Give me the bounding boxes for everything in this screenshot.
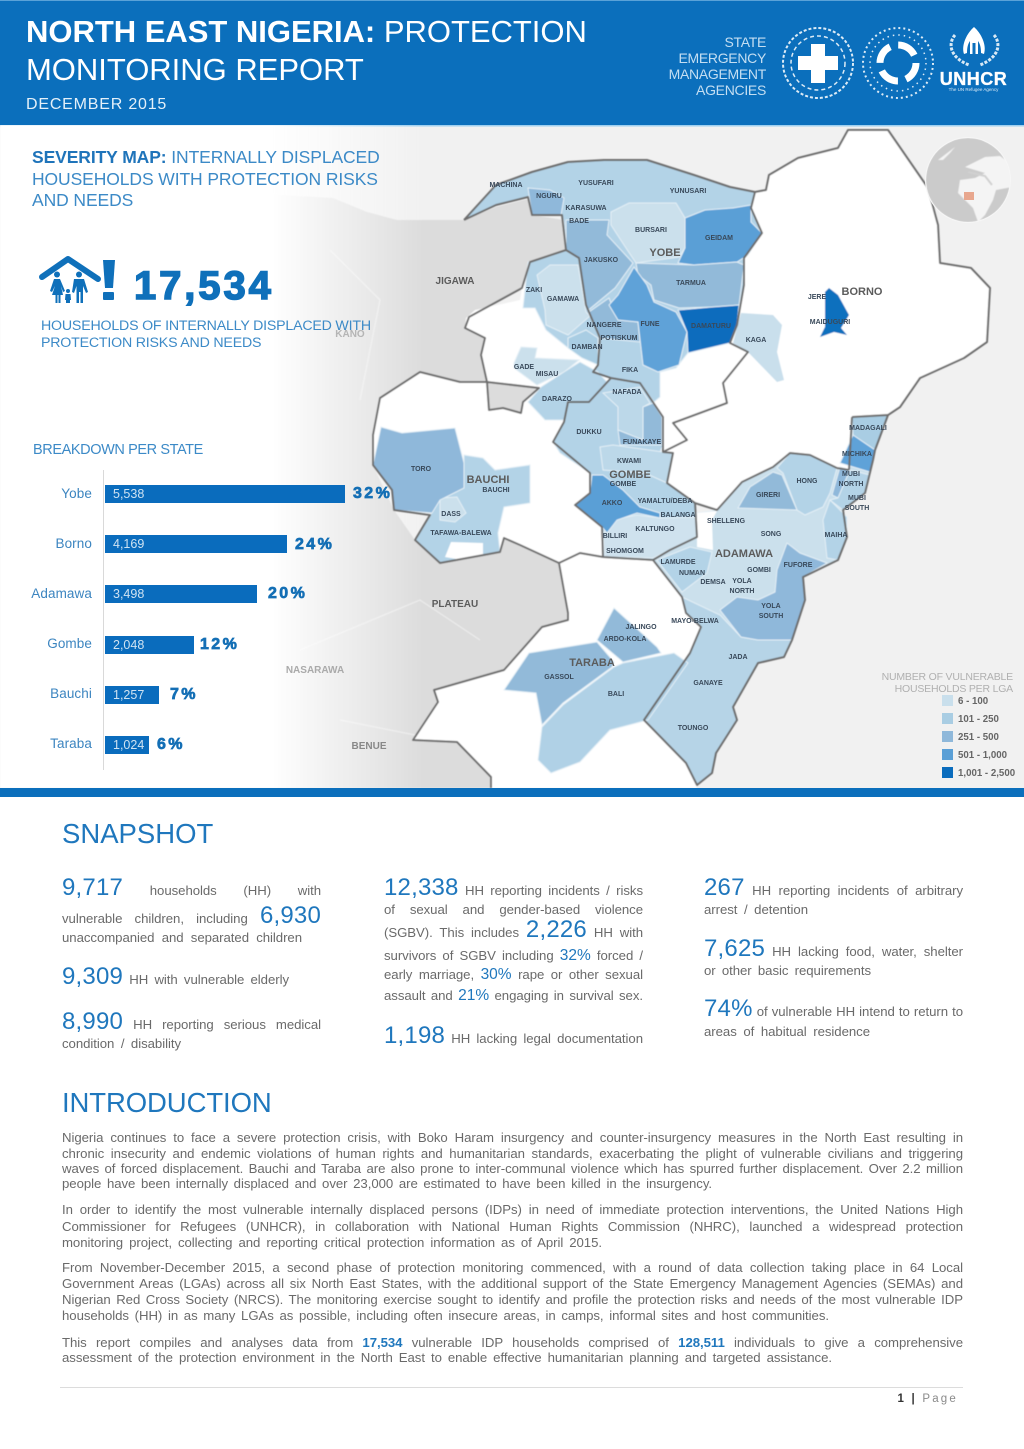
neighbouring and state labels: KANO — [335, 329, 365, 340]
LGA labels: GOMBI — [747, 567, 771, 574]
total households figure: 17,534 — [134, 264, 274, 308]
snapshot column 3 — [704, 874, 963, 1039]
bar chart: breakdown per state: Adamawa — [31, 586, 92, 601]
LGA labels: GOMBE — [610, 481, 637, 488]
LGA labels: TORO — [411, 466, 432, 473]
LGA labels: DEMSA — [700, 579, 726, 586]
LGA labels: MAIHA — [825, 532, 847, 539]
snapshot column 2: survivors of SGBV including 32% forced / — [384, 947, 643, 964]
partner label — [669, 34, 766, 98]
Jakusko — [566, 220, 633, 312]
bar chart: breakdown per state: Gombe — [47, 636, 92, 651]
Geidam — [678, 205, 762, 265]
LGA labels: KALTUNGO — [635, 526, 675, 533]
logo: UNHCR — [940, 27, 1007, 92]
blue divider bar — [0, 788, 1024, 797]
logo: UNHCR: UNHCR — [940, 69, 1007, 89]
introduction text: Nigeria continues to face a severe protection crisis, with Boko Haram insurgency and counter-insurgency measures in the North East resulting in — [62, 1130, 963, 1145]
LGA labels: NORTH — [730, 588, 754, 595]
severity map — [0, 125, 1024, 788]
LGA labels: KARASUWA — [565, 205, 607, 212]
snapshot column 1: condition / disability — [62, 1036, 181, 1051]
snapshot column 1: 8,990 HH reporting serious medical — [62, 1008, 321, 1035]
Nguru — [528, 188, 564, 215]
LGA labels: YUSUFARI — [578, 180, 614, 187]
introduction text: Commissioner for Refugees (UNHCR), in collaboration with National Human Rights Commission (NHRC), launched a widespread protection — [62, 1219, 963, 1234]
neighbouring and state labels: PLATEAU — [432, 599, 478, 610]
map title: AND NEEDS — [32, 190, 133, 210]
LGA labels: MUBI — [842, 471, 860, 478]
LGA labels: JERE — [808, 294, 826, 301]
map title — [32, 147, 380, 210]
footer rule and page number: 1 | Page — [898, 1393, 958, 1405]
introduction text — [62, 1130, 963, 1365]
LGA choropleth: Yobe — [464, 160, 762, 402]
LGA labels: BALI — [608, 691, 624, 698]
LGA labels: ARDO-KOLA — [604, 636, 646, 643]
snapshot column 1: 9,309 HH with vulnerable elderly — [62, 963, 289, 990]
LGA labels: YAMALTU/DEBA — [638, 498, 692, 505]
bar chart: breakdown per state: 4,169 — [113, 537, 144, 551]
LGA labels: DAMATURU — [691, 323, 731, 330]
LGA labels: KWAMI — [617, 458, 641, 465]
snapshot column 1: unaccompanied and separated children — [62, 930, 302, 945]
LGA labels: BAUCHI — [482, 487, 510, 494]
bar chart: breakdown per state: 32% — [353, 485, 392, 502]
bar chart: breakdown per state: 2,048 — [113, 638, 144, 652]
LGA choropleth: Adamawa — [644, 415, 888, 785]
LGA labels: FUFORE — [784, 562, 813, 569]
bar chart: breakdown per state: 7% — [170, 686, 198, 703]
LGA labels: SHOMGOM — [606, 548, 644, 555]
snapshot column 3: 7,625 HH lacking food, water, shelter — [704, 934, 963, 962]
LGA labels: YOLA — [761, 603, 781, 610]
LGA labels: NUMAN — [679, 570, 705, 577]
LGA labels: HONG — [796, 478, 818, 485]
partner label: STATE — [724, 34, 766, 50]
partner label: EMERGENCY — [678, 50, 766, 66]
LGA labels: SOUTH — [759, 613, 783, 620]
report title: MONITORING REPORT — [26, 52, 364, 87]
total households caption: HOUSEHOLDS OF INTERNALLY DISPLACED WITH — [41, 318, 371, 334]
locator globe — [925, 137, 1012, 223]
LGA labels: MAYO-BELWA — [671, 618, 719, 625]
bar chart: breakdown per state: 3,498 — [113, 587, 144, 601]
bar chart: breakdown per state: Yobe — [61, 486, 92, 501]
LGA labels: BADE — [569, 218, 589, 225]
snapshot column 3: or other basic requirements — [704, 963, 871, 978]
LGA choropleth: Gombe — [553, 378, 697, 560]
snapshot column 2: early marriage, 30% rape or other sexual — [384, 966, 643, 983]
LGA choropleth: Taraba — [504, 608, 688, 773]
map legend: 501 - 1,000 — [958, 750, 1007, 761]
LGA labels: GAMAWA — [547, 296, 579, 303]
map legend: NUMBER OF VULNERABLE — [882, 671, 1013, 683]
LGA labels: LAMURDE — [660, 559, 696, 566]
bar chart: breakdown per state — [31, 485, 392, 754]
snapshot column 2: of sexual and gender-based violence — [384, 902, 643, 917]
bar chart axis — [103, 470, 104, 770]
LGA labels: JADA — [728, 654, 748, 661]
LGA labels: GADE — [514, 364, 534, 371]
neighbouring and state labels: TARABA — [569, 657, 615, 669]
state outlines — [373, 130, 990, 788]
bar chart: breakdown per state: Taraba — [50, 736, 92, 751]
Nangere — [589, 298, 640, 342]
map legend: 251 - 500 — [958, 732, 999, 743]
total households caption: PROTECTION RISKS AND NEEDS — [41, 335, 261, 351]
neighbouring states — [200, 190, 579, 788]
LGA labels: MACHINA — [489, 182, 523, 189]
LGA labels: NGURU — [536, 193, 562, 200]
partner label: AGENCIES — [696, 82, 766, 98]
neighbouring and state labels: NASARAWA — [286, 665, 344, 676]
introduction text: In order to identify the most vulnerable internally displaced persons (IDPs) in need of immediate protection interventions, the United Nations High — [62, 1202, 963, 1217]
header band — [0, 0, 1024, 125]
report title: NORTH EAST NIGERIA: PROTECTION — [26, 14, 587, 49]
LGA labels: NAFADA — [612, 389, 642, 396]
LGA labels: BURSARI — [635, 227, 667, 234]
snapshot column 3: 267 HH reporting incidents of arbitrary — [704, 874, 963, 901]
LGA labels: DARAZO — [542, 396, 573, 403]
snapshot column 1 — [62, 874, 321, 1051]
LGA labels: KAGA — [746, 337, 766, 344]
LGA labels: YUNUSARI — [670, 188, 706, 195]
neighbouring and state labels — [286, 247, 883, 752]
introduction text: people have been internally displaced and over 23,000 are estimated to have been killed in the insurgency. — [62, 1176, 712, 1191]
LGA labels: MUBI — [848, 495, 866, 502]
logos — [782, 27, 1007, 99]
introduction text: Nigerian Red Cross Society (NRCS). The monitoring exercise sought to identify and profile the protection risks and needs of the most vulnerable IDP — [62, 1292, 963, 1307]
LGA labels: TOUNGO — [678, 725, 709, 732]
snapshot column 2: assault and 21% engaging in survival sex. — [384, 987, 643, 1004]
snapshot column 3: 74% of vulnerable HH intend to return to — [704, 995, 963, 1022]
snapshot column 2: 1,198 HH lacking legal documentation — [384, 1022, 643, 1049]
LGA labels: TARMUA — [676, 280, 706, 287]
bar chart: breakdown per state: Bauchi — [50, 686, 92, 701]
bar chart: breakdown per state: 20% — [268, 585, 307, 602]
logo: cross emblem — [783, 28, 853, 98]
partner label: MANAGEMENT — [669, 66, 766, 82]
snapshot column 3: arrest / detention — [704, 902, 808, 917]
map legend — [882, 671, 1015, 779]
Damaturu — [678, 305, 739, 353]
LGA labels: MISAU — [536, 371, 558, 378]
icon: family under roof with exclamation — [39, 256, 115, 303]
LGA labels — [411, 180, 887, 732]
introduction text: This report compiles and analyses data from 17,534 vulnerable IDP households comprised of 128,511 individuals to give a comprehensive — [62, 1335, 963, 1350]
logo: UNHCR: The UN Refugee Agency — [949, 87, 999, 92]
snapshot column 3: areas of habitual residence — [704, 1024, 870, 1039]
LGA labels: FIKA — [622, 367, 638, 374]
neighbouring and state labels: BORNO — [842, 286, 883, 298]
introduction text: chronic insecurity and endemic violations of human rights and humanitarian standards, exacerbating the plight of vulnerable civilians and triggering — [62, 1146, 963, 1161]
bar chart: breakdown per state: 6% — [157, 736, 185, 753]
Tarmua — [636, 262, 744, 308]
LGA choropleth: Bauchi — [373, 250, 607, 563]
LGA labels: MICHIKA — [842, 451, 872, 458]
bar chart: breakdown per state: 24% — [295, 536, 334, 553]
LGA labels: BALANGA — [660, 512, 696, 519]
LGA labels: SOUTH — [845, 505, 869, 512]
neighbouring and state labels: JIGAWA — [436, 276, 474, 287]
map legend: 1,001 - 2,500 — [958, 768, 1015, 779]
map legend: 101 - 250 — [958, 714, 999, 725]
bar chart: breakdown per state: 5,538 — [113, 487, 144, 501]
LGA labels: JAKUSKO — [584, 257, 619, 264]
LGA labels: DAMBAN — [571, 344, 603, 351]
introduction heading: INTRODUCTION — [62, 1087, 272, 1118]
Bursari — [611, 203, 685, 263]
neighbouring and state labels: YOBE — [649, 247, 681, 259]
introduction text: households (HH) in as many LGAs as possible, including often insecure areas, in camps, informal sites and host communities. — [62, 1308, 829, 1323]
LGA labels: SHELLENG — [707, 518, 746, 525]
total households caption — [41, 318, 371, 351]
bar chart: breakdown per state: 12% — [200, 636, 239, 653]
bar chart: breakdown per state: 1,257 — [113, 688, 144, 702]
footer rule and page number — [60, 1387, 963, 1418]
map legend: 6 - 100 — [958, 696, 988, 707]
introduction text: waves of forced displacement. Bauchi and Taraba are also prone to inter-communal violence which has spurred further displacement. Over 2.2 million — [62, 1161, 963, 1176]
introduction text: Government Areas (LGAs) across all six North East States, with the additional support of the State Emergency Management Agencies (SEMAs) and — [62, 1276, 963, 1291]
LGA labels: BILLIRI — [603, 533, 627, 540]
LGA labels: FUNAKAYE — [623, 439, 661, 446]
introduction text: From November-December 2015, a second phase of protection monitoring commenced, with a round of data collection taking place in 64 Local — [62, 1260, 963, 1275]
map legend: HOUSEHOLDS PER LGA — [895, 683, 1013, 695]
LGA labels: NORTH — [839, 481, 863, 488]
LGA labels: GASSOL — [544, 674, 575, 681]
LGA labels: TAFAWA-BALEWA — [430, 530, 492, 537]
neighbouring and state labels: GOMBE — [609, 469, 651, 481]
LGA labels: GEIDAM — [705, 235, 733, 242]
introduction text: monitoring project, collecting and reporting critical protection information as of April 2015. — [62, 1235, 602, 1250]
map title: HOUSEHOLDS WITH PROTECTION RISKS — [32, 168, 378, 188]
neighbouring and state labels: ADAMAWA — [715, 548, 773, 560]
bar chart: breakdown per state: Borno — [55, 536, 92, 551]
snapshot column 2: 12,338 HH reporting incidents / risks — [384, 874, 643, 901]
report date: DECEMBER 2015 — [26, 96, 167, 113]
LGA labels: JALINGO — [625, 624, 657, 631]
map title: SEVERITY MAP: INTERNALLY DISPLACED — [32, 147, 380, 167]
gray knob between Bauchi and Gombe — [487, 382, 539, 413]
snapshot column 1: 9,717 households (HH) with — [62, 874, 321, 900]
LGA labels: YOLA — [732, 578, 752, 585]
LGA labels: DUKKU — [576, 429, 602, 436]
LGA labels: SONG — [761, 531, 782, 538]
introduction text: assessment of the protection environment in the North East to enable effective humanitarian planning and targeted assistance. — [62, 1350, 832, 1365]
logo: circular emblem — [863, 28, 933, 98]
LGA labels: FUNE — [640, 321, 660, 328]
snapshot column 1: vulnerable children, including 6,930 — [62, 902, 321, 929]
LGA labels: MAIDUGURI — [810, 319, 850, 326]
LGA labels: ZAKI — [526, 287, 542, 294]
white state bases — [373, 130, 990, 788]
LGA labels: GIRERI — [756, 492, 780, 499]
report title — [26, 14, 587, 87]
LGA labels: GANAYE — [693, 680, 723, 687]
LGA choropleth: Borno — [733, 288, 849, 382]
bar chart: breakdown per state: 1,024 — [113, 738, 144, 752]
LGA labels: AKKO — [602, 500, 623, 507]
LGA labels: POTISKUM — [601, 335, 638, 342]
LGA labels: MADAGALI — [849, 425, 887, 432]
snapshot column 2 — [384, 874, 643, 1049]
breakdown heading: BREAKDOWN PER STATE — [33, 442, 203, 458]
snapshot column 2: (SGBV). This includes 2,226 HH with — [384, 916, 643, 943]
LGA labels: DASS — [441, 511, 461, 518]
neighbouring and state labels: BENUE — [351, 741, 387, 752]
Fune — [609, 267, 687, 372]
snapshot heading: SNAPSHOT — [62, 818, 213, 849]
LGA labels: NANGERE — [586, 322, 622, 329]
neighbouring and state labels: BAUCHI — [467, 474, 509, 486]
